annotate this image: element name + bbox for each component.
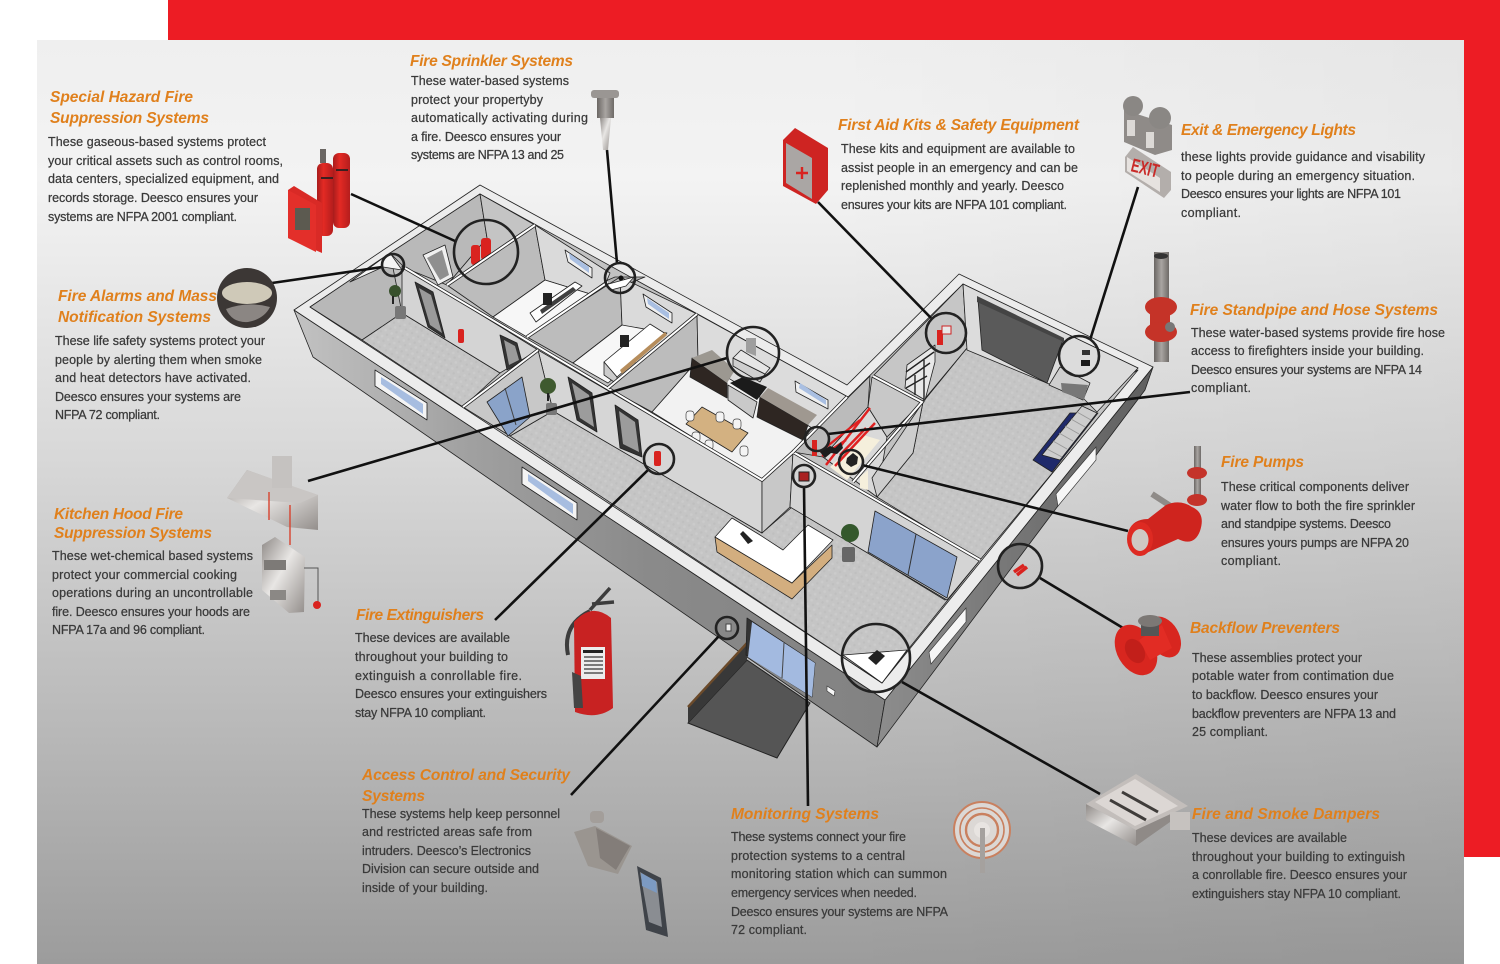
text: Backflow: 25 compliant.: [1192, 725, 1268, 739]
text: Fire Sprinkler: [410, 53, 588, 162]
text: First Aid: ensures your kits are NFPA 101 compliant.: [841, 198, 1067, 212]
range hood: [733, 358, 765, 382]
text: Monitoring: Deesco ensures your systems are NFPA: [731, 905, 949, 919]
text: Dampers: [1192, 806, 1407, 901]
text: Dampers: a conrollable fire. Deesco ensures your: [1192, 868, 1407, 882]
text: Extinguishers: throughout your building to: [355, 650, 508, 664]
text: Standpipe: Fire Standpipe and Hose Systems: [1190, 302, 1438, 319]
pump room: [793, 376, 922, 497]
text: Fire Alarms: Deesco ensures your systems are: [55, 390, 241, 404]
icon: security camera and keypad: [574, 811, 668, 937]
spine wall: [538, 350, 762, 533]
icon: gas suppression cylinders and panel: [288, 149, 350, 253]
text: Fire Pumps: compliant.: [1221, 554, 1281, 568]
text: Fire Sprinkler: automatically activating during: [411, 111, 588, 125]
text: Kitchen Hood: operations during an uncontrollable: [52, 586, 253, 600]
text: Extinguishers: [355, 607, 547, 720]
text: Kitchen Hood: These wet-chemical based systems: [52, 549, 253, 563]
left exterior wall: [294, 310, 885, 747]
right exterior wall: [877, 367, 1153, 747]
fire pump pipework: [820, 408, 875, 466]
text: Fire Pumps: ensures yours pumps are NFPA 20: [1221, 536, 1409, 550]
text: Exit Lights: Exit & Emergency Lights: [1181, 122, 1356, 139]
text: First Aid: First Aid Kits & Safety Equipment: [838, 117, 1080, 134]
text: Kitchen Hood: protect your commercial cooking: [52, 568, 237, 582]
text: Fire Alarms: NFPA 72 compliant.: [55, 408, 160, 422]
text: Fire Pumps: Fire Pumps: [1221, 454, 1304, 471]
text: Standpipe: These water-based systems provide fire hose: [1191, 326, 1445, 340]
text: First Aid: These kits and equipment are available to: [841, 142, 1075, 156]
icon: fire extinguisher: [567, 588, 614, 715]
glass wall: [868, 511, 957, 598]
main front floor: [510, 411, 980, 683]
text: Kitchen Hood: [52, 506, 253, 637]
hazard storage room: [390, 194, 535, 285]
text: Fire Alarms: people by alerting them when smoke: [55, 353, 262, 367]
right cabinets: [757, 397, 808, 440]
text: Access Control: Access Control and Security: [361, 767, 571, 784]
icon: sprinkler head: [591, 90, 619, 150]
left counter: [692, 350, 735, 383]
access reader: [726, 624, 731, 631]
text: Fire Sprinkler: a fire. Deesco ensures your: [411, 130, 561, 144]
text: Special Hazard: Suppression Systems: [50, 110, 209, 127]
text: Access Control: intruders. Deesco’s Electronics: [362, 844, 531, 858]
sprinkler ceiling triangle: [605, 277, 634, 290]
storage rack: [905, 345, 935, 400]
text: Extinguishers: stay NFPA 10 compliant.: [355, 706, 486, 720]
text: Access Control: Systems: [362, 788, 425, 805]
text: Dampers: throughout your building to extinguish: [1192, 850, 1405, 864]
text: Backflow: backflow preventers are NFPA 13 and: [1192, 707, 1396, 721]
text: Access Control: inside of your building.: [362, 881, 488, 895]
left cabinets: [690, 358, 727, 398]
text: Standpipe: compliant.: [1191, 381, 1251, 395]
text: Access Control: and restricted areas safe from: [362, 825, 532, 839]
text: Special Hazard: records storage. Deesco ensures your: [48, 191, 258, 205]
sprinkler head in circle: [618, 276, 624, 280]
text: Extinguishers: These devices are available: [355, 631, 510, 645]
text: Exit Lights: these lights provide guidance and visability: [1181, 150, 1426, 164]
icon: emergency lights and exit sign: [1123, 96, 1172, 198]
stairs: [1033, 413, 1098, 472]
text: Fire Pumps: These critical components deliver: [1221, 480, 1409, 494]
warehouse: [872, 284, 1138, 560]
text: Monitoring: Monitoring Systems: [731, 806, 879, 823]
text: Dampers: These devices are available: [1192, 831, 1347, 845]
text: Backflow: potable water from contimation due: [1192, 669, 1394, 683]
text: Exit Lights: Deesco ensures your lights are NFPA 101: [1181, 187, 1401, 201]
text: Fire Alarms: Fire Alarms and Mass: [58, 288, 217, 305]
icon: fire pump: [1127, 446, 1207, 556]
text: Fire Alarms: [55, 288, 265, 422]
icon: standpipe: [1145, 252, 1177, 362]
callout circles: [382, 220, 1099, 692]
text: Exit Lights: [1181, 122, 1426, 220]
reception desk: [715, 518, 833, 599]
wall to front right room: [790, 452, 980, 600]
text: Fire Sprinkler: These water-based systems: [411, 74, 569, 88]
icon: kitchen hood and panel: [227, 456, 321, 613]
red backdrop: [168, 0, 1500, 857]
building cutaway: [294, 185, 1153, 758]
text: Kitchen Hood: fire. Deesco ensures your hoods are: [52, 605, 250, 619]
exit lights: [1082, 350, 1090, 355]
text: Fire Alarms: These life safety systems protect your: [55, 334, 265, 348]
text: Dampers: Fire and Smoke Dampers: [1192, 806, 1380, 823]
icon: smoke detector: [217, 268, 277, 328]
pump room right wall: [872, 402, 923, 497]
first aid wall unit: [937, 330, 943, 345]
damper device: [868, 650, 885, 665]
icon: first aid cabinet: [783, 128, 828, 204]
text: Backflow: Backflow Preventers: [1190, 620, 1340, 637]
extinguisher in circle: [654, 451, 661, 466]
text: Backflow: These assemblies protect your: [1192, 651, 1362, 665]
corner damper triangle: [843, 650, 907, 683]
text: Backflow: to backflow. Deesco ensures your: [1192, 688, 1378, 702]
left end room: [310, 253, 538, 407]
text: Monitoring: protection systems to a central: [731, 849, 905, 863]
text: Monitoring: [731, 806, 949, 937]
text: Monitoring: monitoring station which can summon: [731, 867, 947, 881]
text: Exit Lights: to people during an emergency situation.: [1181, 169, 1415, 183]
text: Standpipe: Deesco ensures your systems are NFPA 14: [1191, 363, 1422, 377]
text: Extinguishers: Fire Extinguishers: [356, 607, 484, 624]
text: Fire Pumps: and standpipe systems. Deesco: [1221, 517, 1391, 531]
text: Access Control: Division can secure outside and: [362, 862, 539, 876]
text: Exit Lights: compliant.: [1181, 206, 1241, 220]
text: Monitoring: emergency services when needed.: [731, 886, 917, 900]
right counter: [760, 388, 817, 425]
icon: backflow preventer: [1106, 610, 1188, 683]
text: Fire Sprinkler: Fire Sprinkler Systems: [410, 53, 573, 70]
text: Standpipe: access to firefighters inside your building.: [1191, 344, 1424, 358]
sprinkler ceiling sliver: [527, 277, 645, 340]
plants: [389, 285, 859, 562]
wall tops: [405, 225, 980, 560]
connector lines: [272, 150, 1190, 806]
text: Fire Alarms: Notification Systems: [58, 309, 211, 326]
text: First Aid: [838, 117, 1080, 212]
text: Kitchen Hood: Kitchen Hood Fire: [54, 506, 183, 523]
entrance: [688, 618, 815, 758]
fire extinguisher on wall: [458, 329, 464, 343]
text: Special Hazard: systems are NFPA 2001 compliant.: [48, 210, 237, 224]
text: Access Control: [361, 767, 571, 895]
roof band: [294, 185, 1153, 700]
text: First Aid: assist people in an emergency and can be: [841, 161, 1078, 175]
partition with glass door: [463, 350, 553, 436]
text: Backflow: [1190, 620, 1396, 739]
icon: monitoring antenna: [954, 802, 1010, 873]
text: Access Control: These systems help keep personnel: [362, 807, 560, 821]
text: Extinguishers: extinguish a conrollable fire.: [355, 669, 522, 683]
stub wall: [762, 452, 793, 533]
text: Fire Pumps: water flow to both the fire sprinkler: [1220, 499, 1415, 513]
office room two: [527, 277, 698, 412]
text: First Aid: replenished monthly and yearly. Deesco: [841, 179, 1064, 193]
text: Fire Alarms: and heat detectors have activated.: [55, 371, 251, 385]
icon: emergency lights and exit sign: EXIT: [1129, 155, 1161, 183]
text: Special Hazard: your critical assets such as control rooms,: [48, 154, 283, 168]
icon: smoke damper: [1086, 774, 1190, 846]
text: Monitoring: 72 compliant.: [731, 923, 807, 937]
text: Kitchen Hood: NFPA 17a and 96 compliant.: [52, 623, 205, 637]
text: Special Hazard: Special Hazard Fire: [50, 89, 193, 106]
text: Standpipe: [1190, 302, 1445, 395]
stove: [728, 385, 757, 418]
front wall windows: [375, 370, 1096, 696]
text: Monitoring: These systems connect your fire: [731, 830, 906, 844]
office room one: [447, 225, 610, 337]
text: Kitchen Hood: Suppression Systems: [54, 525, 212, 542]
text: Special Hazard: These gaseous-based systems protect: [48, 135, 267, 149]
text: Special Hazard: data centers, specialized equipment, and: [48, 172, 279, 186]
text: Fire Sprinkler: systems are NFPA 13 and 25: [411, 148, 564, 162]
text: Dampers: extinguishers stay NFPA 10 compliant.: [1192, 887, 1401, 901]
text: Special Hazard: [48, 89, 283, 224]
text: Fire Pumps: [1220, 454, 1415, 568]
backflow device in circle: [1014, 565, 1027, 575]
text: Fire Sprinkler: protect your propertyby: [411, 93, 544, 107]
interior base: [310, 194, 1138, 683]
dining table: [686, 407, 748, 452]
text: Extinguishers: Deesco ensures your extinguishers: [355, 687, 547, 701]
monitoring panel: [799, 472, 809, 481]
kitchen: [608, 314, 848, 480]
